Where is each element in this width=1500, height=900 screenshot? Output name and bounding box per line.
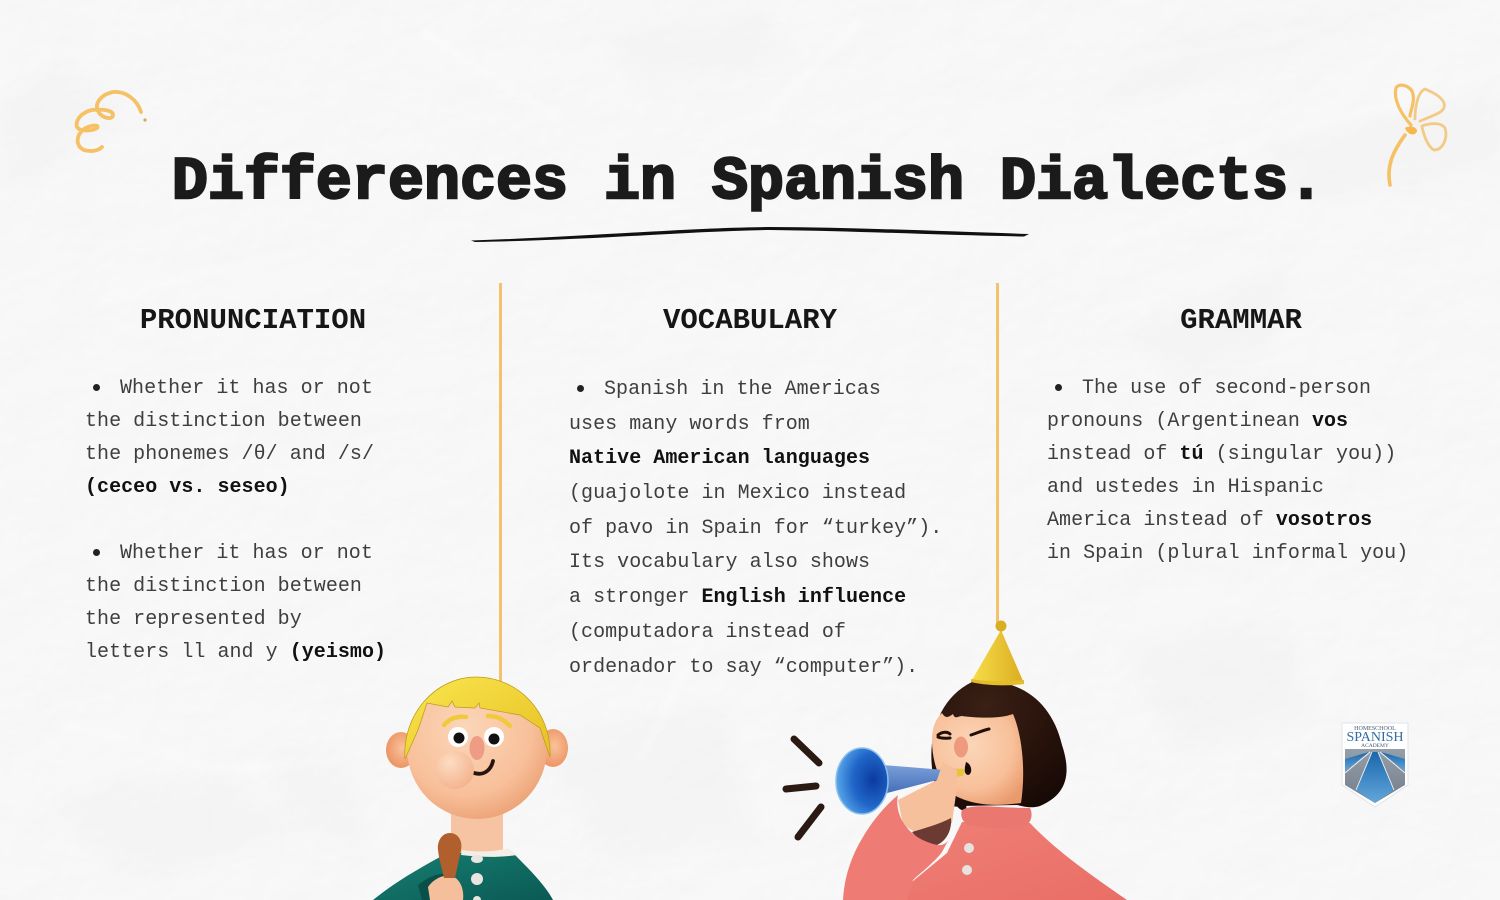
logo text: HOMESCHOOL [1354, 726, 1396, 732]
boy collar [461, 848, 517, 857]
text block: grammar: in Spain (plural informal you) [1047, 542, 1408, 565]
text block: grammar: instead of tú (singular you)) [1047, 443, 1396, 466]
heading: pronunciation: PRONUNCIATION [140, 304, 366, 337]
text block: pronunciation: Whether it has or not [120, 542, 373, 565]
title: Differences in Spanish Dialects. [172, 149, 1324, 217]
doodle: flower [1387, 84, 1448, 187]
horn bell [836, 748, 888, 814]
text block: vocabulary: a stronger English influence [569, 586, 906, 609]
boy drumstick [438, 833, 461, 878]
girl eyes [938, 729, 989, 738]
character: girl [786, 620, 1127, 900]
logo text [1346, 726, 1404, 749]
boy cheek [436, 751, 474, 789]
text block: pronunciation: Whether it has or not [120, 377, 373, 400]
girl face [932, 713, 1023, 805]
column divider left [499, 283, 502, 683]
boy nose [470, 736, 484, 760]
text block: vocabulary: of pavo in Spain for “turkey”). [569, 517, 942, 540]
boy head [407, 677, 547, 819]
girl buttons [962, 843, 974, 875]
text block: grammar: The use of second-person [1082, 377, 1371, 400]
text block: pronunciation: the distinction between [85, 575, 362, 598]
text block: pronunciation: letters ll and y (yeismo) [85, 641, 386, 664]
text block: vocabulary: (guajolote in Mexico instead [569, 482, 906, 505]
text block: pronunciation [85, 377, 386, 664]
column divider right [996, 283, 999, 628]
boy hand [428, 875, 463, 900]
girl hair [931, 681, 1067, 807]
boy neck [451, 812, 503, 854]
logo ray lines [1345, 752, 1405, 790]
heading: vocabulary: VOCABULARY [663, 304, 837, 337]
text block: pronunciation: the represented by [85, 608, 302, 631]
girl mouth [965, 762, 971, 775]
text block: vocabulary: ordenador to say “computer”). [569, 656, 918, 679]
girl sweater [890, 822, 1127, 900]
text block: vocabulary: Spanish in the Americas [604, 378, 881, 401]
boy eyes [448, 727, 504, 747]
text block: pronunciation: (ceceo vs. seseo) [85, 476, 290, 499]
text block: grammar: pronouns (Argentinean vos [1047, 410, 1348, 433]
text block: vocabulary: Its vocabulary also shows [569, 551, 870, 574]
boy body [373, 850, 553, 900]
girl sleeve [843, 795, 950, 900]
title underline [471, 227, 1029, 242]
boy mouth [474, 761, 493, 774]
text block: grammar: America instead of vosotros [1047, 509, 1372, 532]
logo text: SPANISH [1346, 730, 1404, 745]
horn sound lines [786, 739, 821, 837]
girl nose [954, 736, 968, 758]
heading: grammar: GRAMMAR [1180, 304, 1302, 337]
horn tube [883, 765, 945, 793]
boy hair [405, 677, 550, 759]
boy buttons [471, 855, 483, 900]
logo: Homeschool Spanish Academy [1342, 723, 1408, 807]
girl sleeve cuff interior [912, 818, 951, 845]
text block: vocabulary: (computadora instead of [569, 621, 846, 644]
girl collar [961, 806, 1032, 828]
text block: grammar [1047, 377, 1408, 565]
doodle: scribble [74, 90, 147, 153]
girl hair tuft [950, 788, 967, 811]
horn mouthpiece [945, 768, 965, 778]
logo shield panel [1345, 749, 1405, 803]
boy ears [386, 729, 568, 768]
girl party hat [971, 620, 1024, 685]
text block: pronunciation: the phonemes /θ/ and /s/ [85, 443, 374, 466]
logo text: ACADEMY [1361, 743, 1389, 749]
character: boy [373, 677, 568, 900]
text block: pronunciation: the distinction between [85, 410, 362, 433]
text block: vocabulary [569, 378, 942, 679]
girl hand [898, 762, 957, 838]
text block: vocabulary: Native American languages [569, 447, 870, 470]
boy sleeve cuff [418, 874, 448, 900]
text block: grammar: and ustedes in Hispanic [1047, 476, 1324, 499]
text block: vocabulary: uses many words from [569, 413, 810, 436]
boy eyebrows [444, 716, 510, 726]
logo rays [1345, 752, 1405, 803]
